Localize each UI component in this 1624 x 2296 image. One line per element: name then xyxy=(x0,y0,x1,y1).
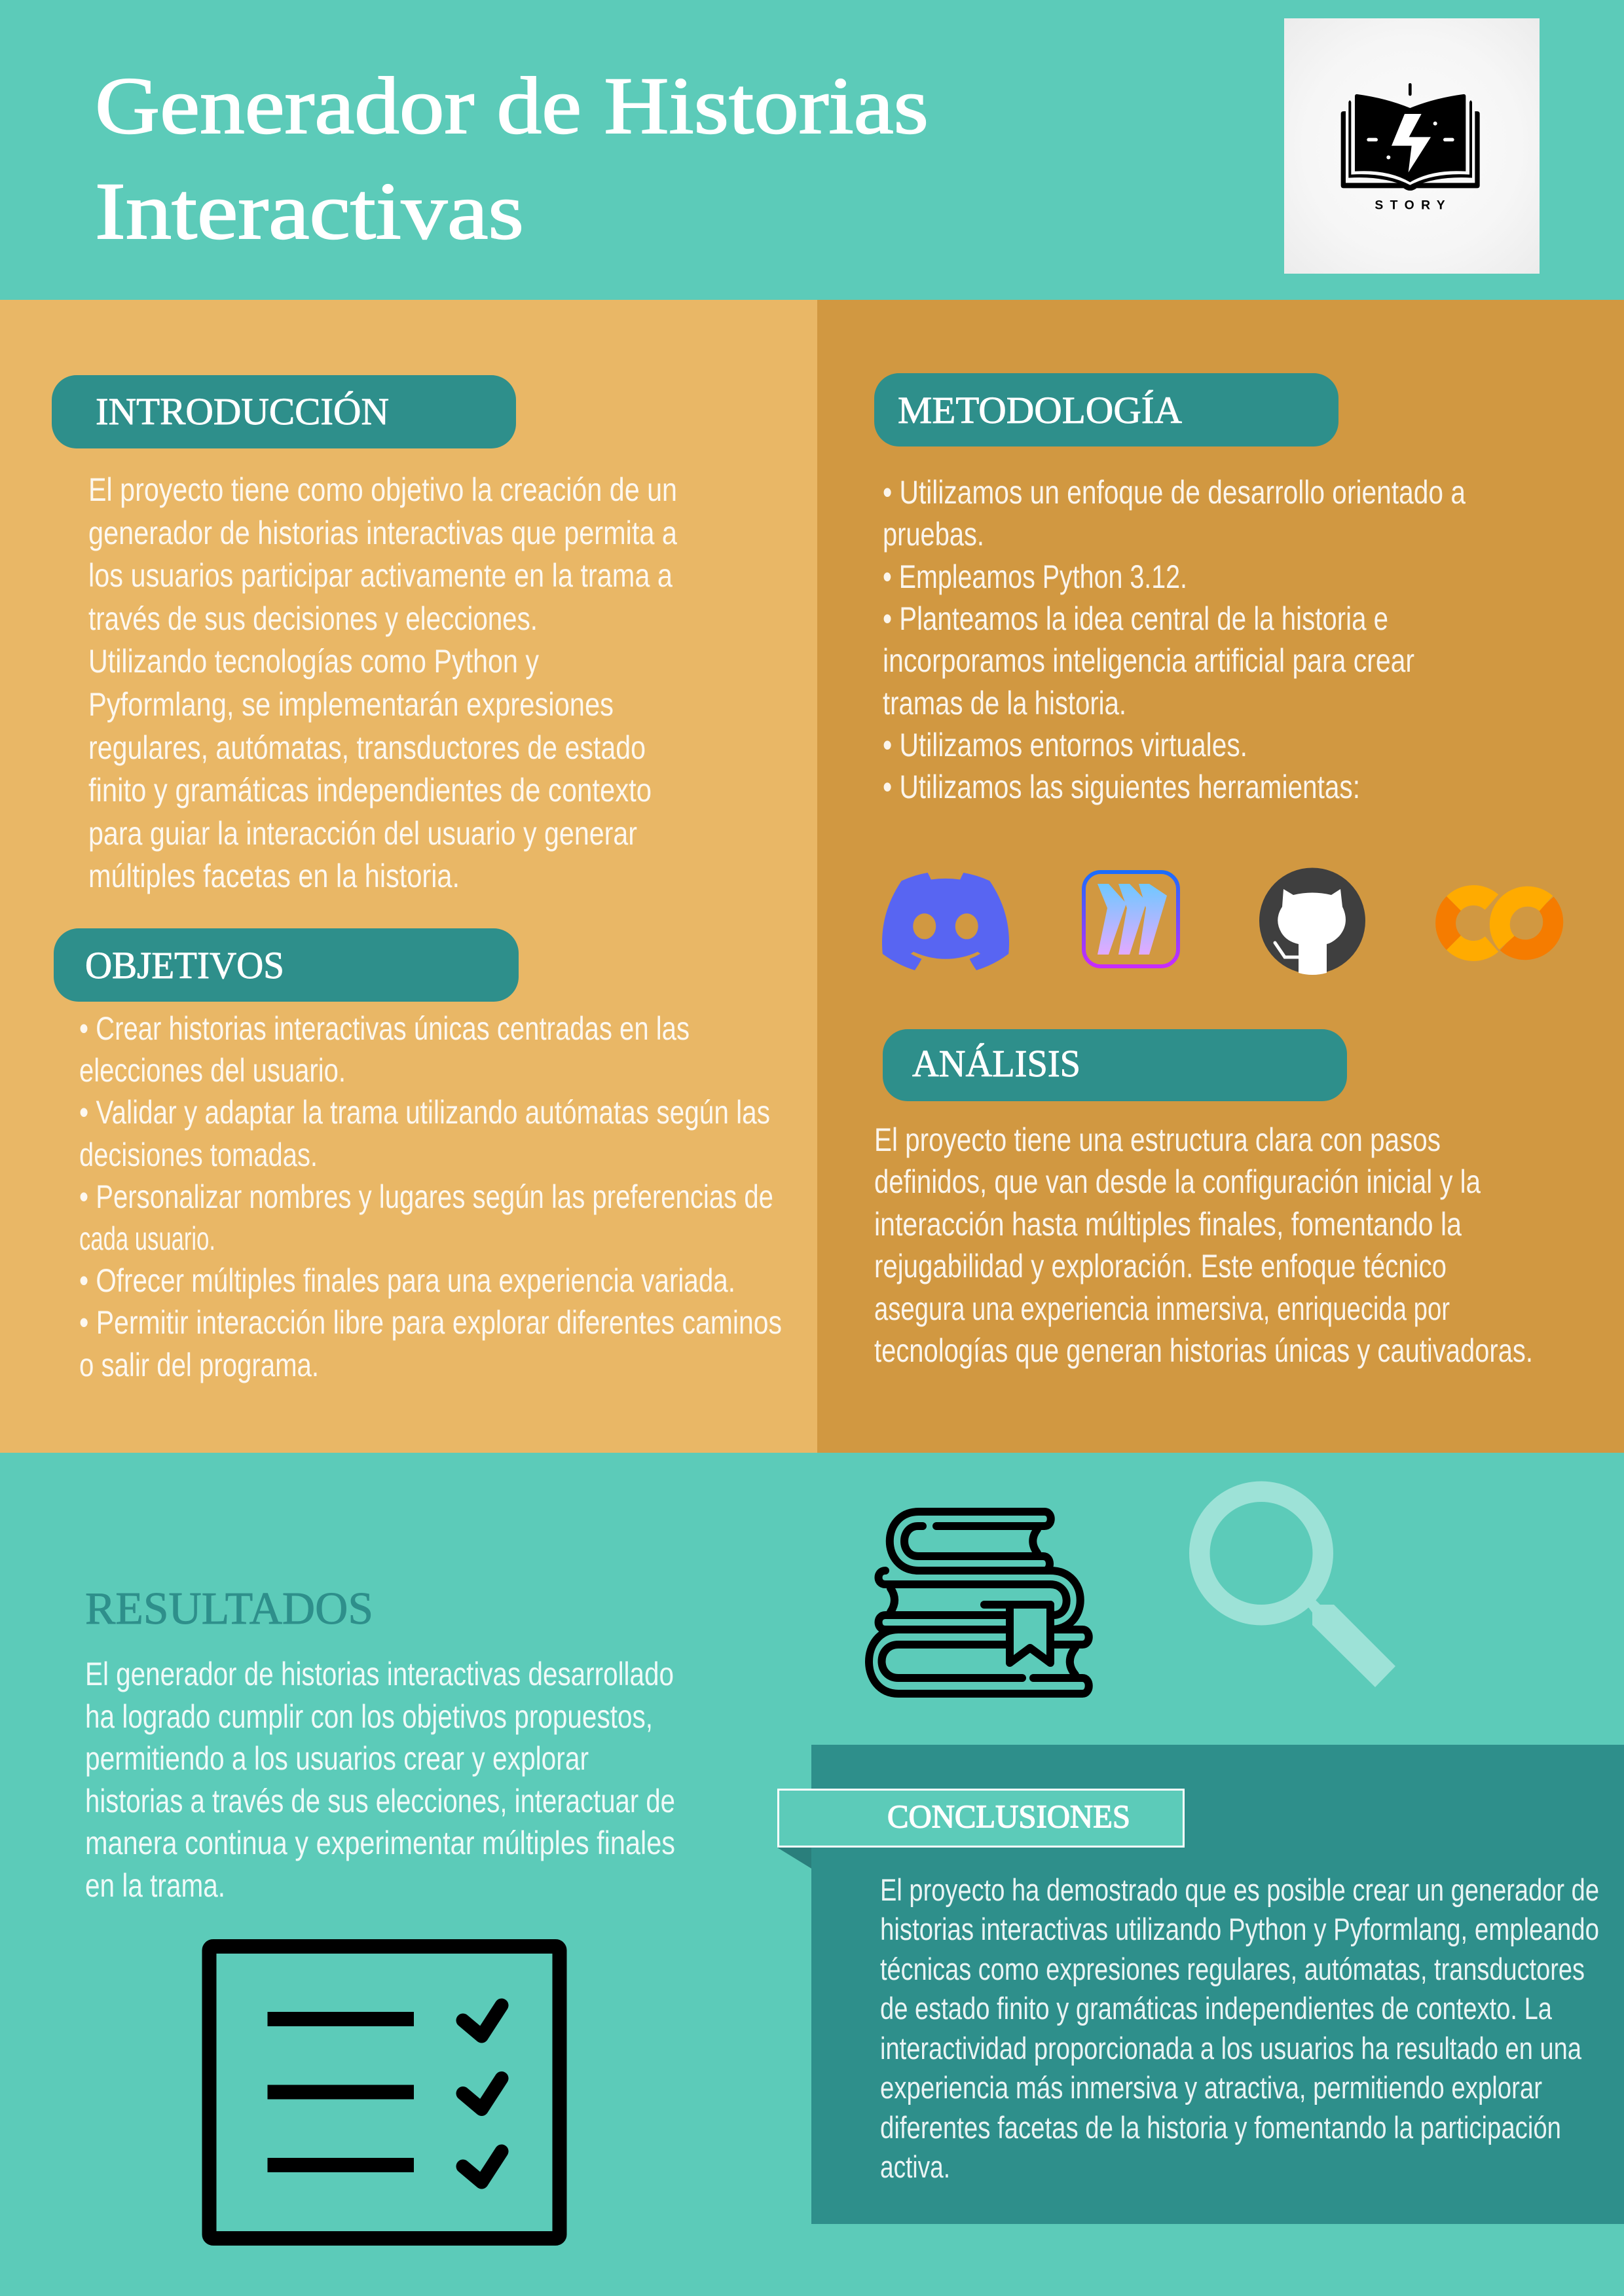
text block: análisis: interacción hasta múltiples finales, fomentando la xyxy=(874,1206,1462,1243)
text block: resultados xyxy=(85,1656,675,1904)
heading: conclusiones xyxy=(778,1790,1184,1846)
text block: introducción: Utilizando tecnologías como Python y xyxy=(88,643,539,680)
heading: objetivos: OBJETIVOS xyxy=(85,944,284,987)
text block: introducción xyxy=(88,471,677,894)
icon: stack of books xyxy=(869,1512,1089,1694)
text block: resultados: historias a través de sus elecciones, interactuar de xyxy=(85,1783,675,1819)
text block: resultados: permitiendo a los usuarios crear y explorar xyxy=(85,1740,589,1777)
text block: introducción: para guiar la interacción del usuario y generar xyxy=(88,815,637,852)
text block: introducción: finito y gramáticas independientes de contexto xyxy=(88,772,652,809)
text block: análisis xyxy=(874,1121,1533,1369)
icon: google colab xyxy=(1446,896,1553,951)
text block: introducción: El proyecto tiene como objetivo la creación de un xyxy=(88,471,677,508)
heading: metodología xyxy=(874,373,1338,446)
panel: right column background xyxy=(817,300,1624,1453)
text block: introducción: través de sus decisiones y elecciones. xyxy=(88,600,538,637)
text block: introducción: múltiples facetas en la historia. xyxy=(88,858,460,894)
text block: análisis: definidos, que van desde la configuración inicial y la xyxy=(874,1163,1481,1200)
text block: objetivos: • Ofrecer múltiples finales para una experiencia variada. xyxy=(79,1262,735,1299)
heading: introducción xyxy=(52,375,516,448)
text block: introducción: generador de historias interactivas que permita a xyxy=(88,515,677,551)
text block: objetivos: • Personalizar nombres y lugares según las preferencias de xyxy=(79,1178,773,1215)
heading: análisis: ANÁLISIS xyxy=(912,1042,1080,1085)
heading: conclusiones: CONCLUSIONES xyxy=(887,1798,1130,1834)
panel: left column background xyxy=(0,300,817,1453)
title: Interactivas xyxy=(95,166,524,256)
text block: resultados: en la trama. xyxy=(85,1867,225,1904)
text block: análisis: El proyecto tiene una estructura clara con pasos xyxy=(874,1121,1441,1158)
icon: github xyxy=(1259,868,1365,975)
text block: conclusiones xyxy=(880,1872,1599,2184)
text block: objetivos: decisiones tomadas. xyxy=(79,1137,318,1173)
text block: objetivos: cada usuario. xyxy=(79,1220,215,1257)
title: Generador de Historias xyxy=(95,61,929,151)
title xyxy=(95,61,929,256)
text block: introducción: los usuarios participar activamente en la trama a xyxy=(88,557,673,594)
text block: metodología: • Utilizamos un enfoque de desarrollo orientado a xyxy=(883,474,1466,511)
text block: objetivos xyxy=(79,1010,782,1383)
text block: metodología: • Planteamos la idea central de la historia e xyxy=(883,600,1388,637)
logo: open book with lightning bolt xyxy=(1284,18,1540,274)
text block: resultados: El generador de historias interactivas desarrollado xyxy=(85,1656,674,1692)
heading: objetivos xyxy=(54,928,519,1002)
text block: objetivos: • Permitir interacción libre para explorar diferentes caminos xyxy=(79,1304,782,1341)
text block: análisis: rejugabilidad y exploración. Este enfoque técnico xyxy=(874,1248,1447,1285)
text block: introducción: regulares, autómatas, transductores de estado xyxy=(88,729,646,766)
text block: resultados: ha logrado cumplir con los objetivos propuestos, xyxy=(85,1698,653,1735)
text block: objetivos: • Validar y adaptar la trama utilizando autómatas según las xyxy=(79,1094,770,1131)
text block: objetivos: elecciones del usuario. xyxy=(79,1052,346,1089)
background: header band xyxy=(0,0,1624,300)
heading: análisis xyxy=(883,1029,1347,1101)
heading: introducción: INTRODUCCIÓN xyxy=(96,390,389,433)
text block: análisis: asegura una experiencia inmersiva, enriquecida por xyxy=(874,1290,1450,1327)
panel: conclusiones xyxy=(777,1745,1624,2224)
text block: metodología: tramas de la historia. xyxy=(883,685,1126,721)
text block: objetivos: • Crear historias interactivas únicas centradas en las xyxy=(79,1010,690,1047)
text block: metodología: incorporamos inteligencia artificial para crear xyxy=(883,642,1414,679)
text block: metodología: • Utilizamos las siguientes herramientas: xyxy=(883,769,1360,805)
heading: resultados: RESULTADOS xyxy=(85,1584,373,1634)
text block: metodología xyxy=(883,474,1466,805)
text block: resultados: manera continua y experimentar múltiples finales xyxy=(85,1825,675,1861)
logo: open book with lightning bolt: STORY xyxy=(1375,198,1445,212)
text block: conclusiones: activa. xyxy=(880,2149,950,2184)
icon: discord xyxy=(882,873,1009,970)
icon: magnifying glass xyxy=(1189,1481,1395,1687)
text block: objetivos: o salir del programa. xyxy=(79,1347,319,1383)
icon: miro xyxy=(1084,872,1178,966)
text block: introducción: Pyformlang, se implementarán expresiones xyxy=(88,686,614,723)
text block: metodología: • Empleamos Python 3.12. xyxy=(883,558,1187,595)
text block: metodología: pruebas. xyxy=(883,516,984,553)
heading: metodología: METODOLOGÍA xyxy=(898,389,1182,431)
text block: metodología: • Utilizamos entornos virtuales. xyxy=(883,727,1247,763)
icon: checklist xyxy=(210,1946,559,2238)
